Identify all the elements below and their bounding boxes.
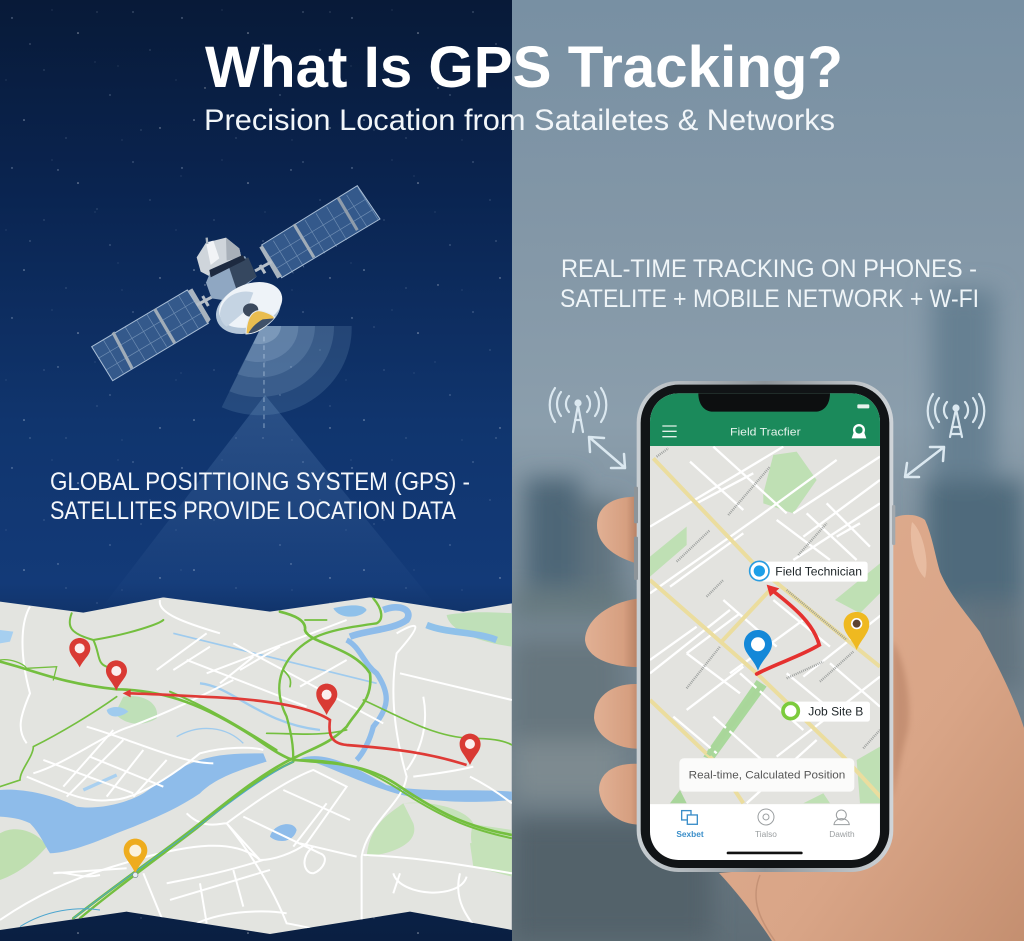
marker: field technician: Field Technician <box>775 565 862 578</box>
map pin 3 <box>316 684 337 715</box>
bottom tab bar: Tialso <box>755 829 777 839</box>
parks and water <box>0 605 512 880</box>
marker: job site b: Job Site B <box>808 705 864 718</box>
text: real-time tracking: REAL-TIME TRACKING ON PHONES - <box>561 255 977 283</box>
panel: left space background <box>0 0 512 941</box>
signal waves <box>222 326 352 430</box>
white roads <box>0 600 512 937</box>
map pin yellow <box>124 839 147 878</box>
arrow: left antenna to phone <box>589 437 625 468</box>
solar panel upper <box>255 186 380 279</box>
arrow: right antenna to phone <box>905 447 944 477</box>
subtitle: Precision Location from Satailetes & Networks <box>204 104 835 137</box>
solar panel lower <box>92 288 214 381</box>
title: What Is GPS Tracking? <box>205 35 843 100</box>
blue location pin <box>744 630 772 671</box>
yellow pin <box>844 612 869 650</box>
map pin 1 <box>69 638 90 667</box>
text: real-time tracking <box>560 255 979 313</box>
hand: finger 2 <box>585 598 644 667</box>
map pin 4 <box>460 734 481 765</box>
text: global positioning system: GLOBAL POSITTIOING SYSTEM (GPS) - <box>50 468 470 496</box>
callout <box>679 758 854 792</box>
text: real-time tracking: SATELITE + MOBILE NETWORK + W-FI <box>560 285 979 313</box>
satellite <box>92 186 380 430</box>
icon: left antenna <box>550 388 606 432</box>
bottom tab bar: Sexbet <box>676 829 704 839</box>
map <box>0 590 512 941</box>
satellite body <box>197 238 289 343</box>
callout: Real-time, Calculated Position <box>689 769 845 781</box>
marker: field technician <box>750 561 868 582</box>
smartphone <box>634 381 895 872</box>
hand: finger 4 <box>599 764 648 825</box>
hand: finger 1 <box>597 497 642 565</box>
route on phone <box>757 585 819 674</box>
text: global positioning system: SATELLITES PROVIDE LOCATION DATA <box>50 497 456 525</box>
phone map <box>650 446 883 804</box>
panel: right blurred city background <box>512 0 1024 941</box>
bottom tab bar <box>676 809 855 854</box>
green routes <box>0 598 512 918</box>
app header <box>650 393 880 446</box>
marker: job site b <box>783 702 870 722</box>
hand: palm and thumb <box>719 515 1024 941</box>
icon: right antenna <box>928 394 984 437</box>
bottom tab bar: Dawith <box>829 829 855 839</box>
hand: finger 3 <box>594 684 648 749</box>
text: global positioning system <box>50 468 470 525</box>
red route arrow <box>123 689 467 765</box>
app header: Field Tracfier <box>730 426 801 438</box>
map pin 2 <box>106 660 127 691</box>
